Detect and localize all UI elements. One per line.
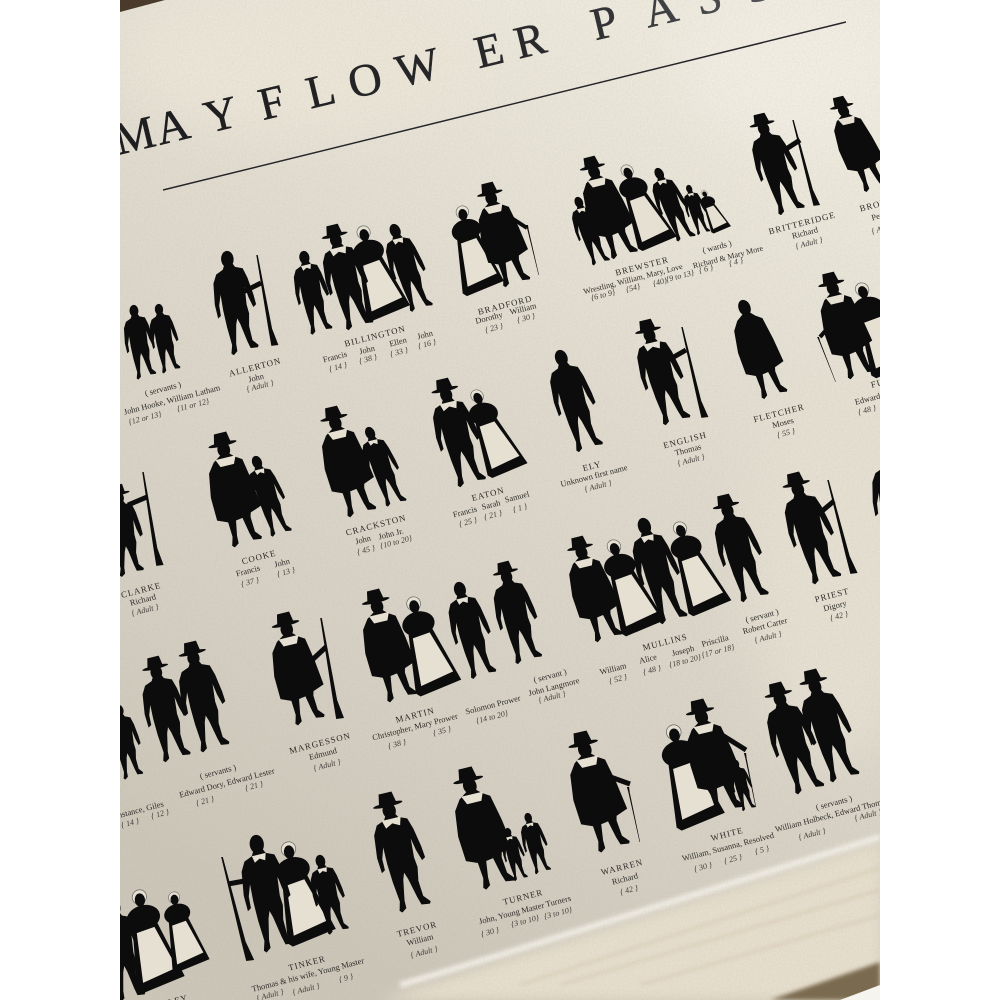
label: Billington: Ellen: [388, 335, 408, 349]
silhouettes: William Holbeck, Edward Thompson: [754, 665, 865, 797]
label: Crackston: John: [354, 533, 373, 546]
silhouette: Thomas with musket: [625, 315, 709, 428]
label: Britteridge: BRITTERIDGE: [768, 210, 836, 236]
label: Billington: { 14 }: [328, 360, 349, 374]
label: servants: ( servants ): [815, 794, 853, 812]
family: servants Dory and Lester: [133, 637, 276, 808]
label: Mullins: Joseph: [671, 644, 696, 658]
silhouettes: Thomas, wife and Young Master: [220, 829, 353, 961]
silhouettes: two servants: [119, 301, 184, 381]
silhouettes: Edward and wife: [807, 268, 917, 382]
label: Crackston: CRACKSTON: [345, 512, 407, 538]
title rule: [163, 22, 846, 190]
label: servants: ( servants ): [199, 763, 237, 781]
silhouettes: Edward Dory, Edward Lester: [133, 637, 235, 765]
label: Fuller: [854, 370, 910, 417]
label: Cooke: { 37 }: [240, 575, 261, 589]
family: Margesson: [261, 607, 352, 773]
label: Crackston: John Jr.: [377, 526, 405, 542]
label: Constance, Giles: [107, 800, 171, 830]
label: Bradford: William: [509, 301, 538, 317]
label: Billington: { 38 }: [358, 352, 379, 366]
label: Eaton: { 1 }: [512, 502, 529, 514]
silhouette: John with musket: [207, 246, 279, 358]
label: Billington: [322, 323, 438, 374]
label: Brewster: [582, 239, 765, 302]
label: servants: ( servants ): [144, 380, 182, 398]
family: Billington: [287, 220, 438, 374]
label: Allerton: John: [247, 371, 266, 384]
label: Billington: Francis: [322, 350, 348, 364]
label: White: { 30 }: [693, 860, 714, 874]
label: Brewster: Richard & Mary More: [692, 243, 765, 270]
label: Eaton: Sarah: [481, 498, 502, 512]
label: Turner: {3 to 10}: [543, 905, 574, 921]
label: Billington: { 16 }: [417, 337, 438, 351]
label: Bradford: { 30 }: [516, 311, 537, 325]
label: Turner: {3 to 10}: [510, 913, 541, 929]
label: Margesson: { Adult }: [313, 757, 342, 773]
label: Ely: { Adult }: [584, 478, 613, 494]
label: Fletcher: { 55 }: [776, 426, 797, 440]
label: Constance, Giles: { 12 }: [150, 807, 171, 821]
label: Trevor: William: [406, 932, 435, 948]
label: Mullins: {17 or 18}: [701, 642, 736, 660]
label: Constance, Giles: { 14 }: [120, 816, 141, 830]
silhouettes: Martin family: [351, 557, 547, 705]
label: Mullins: Robert Carter: [742, 616, 789, 636]
label: Clarke: [120, 580, 162, 618]
family: Warren: [556, 726, 644, 897]
label: Martin: { 35 }: [432, 724, 453, 738]
label: Clarke: { Adult }: [131, 602, 160, 618]
label: Ely: ELY: [581, 459, 603, 473]
silhouette: partial figure: [104, 702, 147, 781]
label: Martin: Christopher, Mary Prower: [371, 712, 459, 742]
label: Martin: ( servant ): [532, 667, 568, 685]
label: English: { Adult }: [677, 452, 706, 468]
label: White: William, Susanna, Resolved: [681, 831, 776, 863]
label: Priest: Digory: [822, 598, 848, 613]
family: Martin: [351, 557, 581, 751]
family: Brewster: [564, 152, 765, 302]
label: White: [681, 825, 776, 874]
label: Margesson: [288, 730, 352, 773]
label: Cooke: COOKE: [241, 548, 277, 566]
family: Eaton: [422, 374, 531, 529]
label: Priest: { 42 }: [829, 609, 850, 623]
label: Fletcher: FLETCHER: [752, 402, 806, 424]
label: Brewster: {40}: [652, 276, 669, 288]
label: Martin: [371, 667, 581, 751]
label: Tinker: TINKER: [287, 953, 327, 973]
label: Margesson: MARGESSON: [288, 730, 352, 756]
family: Tilley: [94, 883, 211, 1000]
label: Trevor: TREVOR: [396, 919, 438, 939]
silhouettes: John and two sons: [441, 762, 554, 893]
label: Priest: [814, 586, 850, 623]
label: servants: {11 or 12}: [176, 396, 211, 413]
silhouette: Ely: [540, 345, 608, 455]
label: Mullins: MULLINS: [641, 631, 689, 653]
silhouettes: Mullins family and servant: [556, 490, 774, 645]
label: Mullins: { 48 }: [642, 663, 663, 677]
label: Tinker: { Adult }: [292, 981, 321, 997]
label: Eaton: Samuel: [504, 489, 531, 505]
label: White: { 5 }: [754, 844, 771, 856]
label: Britteridge: Richard: [791, 225, 820, 241]
label: Mullins: Alice: [638, 652, 658, 666]
label: Mullins: [599, 607, 789, 686]
label: Trevor: [396, 919, 439, 960]
label: Margesson: Edmund: [308, 746, 339, 762]
label: servants: { Adult }: [798, 826, 827, 842]
label: Warren: [600, 857, 644, 897]
label: Clarke: Richard: [129, 592, 158, 608]
family: Tinker: [220, 829, 365, 1000]
silhouettes: Francis and Sarah: [422, 374, 530, 490]
label: servants: { 21 }: [244, 779, 265, 793]
label: Clarke: CLARKE: [120, 580, 162, 600]
label: Britteridge: [768, 210, 836, 251]
label: Mullins: { 52 }: [608, 672, 629, 686]
silhouettes: Brewster family and wards: [564, 152, 732, 267]
silhouette: William: [363, 787, 436, 915]
label: Mullins: {18 to 20}: [668, 652, 703, 669]
label: Brewster: {6 to 9}: [590, 287, 617, 302]
label: Brewster: {9 to 13}: [665, 268, 696, 284]
label: Bradford: [474, 293, 538, 335]
silhouette: Edmund with musket: [261, 607, 344, 728]
label: Allerton: { Adult }: [246, 378, 275, 394]
label: Cooke: [235, 548, 297, 589]
label: Bradford: { 23 }: [484, 321, 505, 335]
label: servants: { 21 }: [195, 794, 216, 808]
family: Ely: [540, 345, 629, 494]
label: servants: Edward Dory, Edward Lester: [178, 766, 276, 800]
silhouettes: William, Susanna, Resolved: [653, 694, 758, 832]
family: Clarke: [100, 472, 164, 618]
label: White: { 25 }: [723, 852, 744, 866]
silhouettes: Billington family: [287, 220, 437, 337]
label: Ely: Unknown first name: [560, 463, 629, 489]
label: Eaton: EATON: [470, 485, 506, 503]
family: Allerton: [207, 246, 282, 394]
label: Martin: John Langmore: [528, 676, 581, 698]
label: Eaton: Francis: [452, 505, 478, 519]
label: Allerton: ALLERTON: [228, 355, 282, 379]
label: Martin: {14 to 20}: [475, 708, 510, 725]
family: Priest: [772, 468, 858, 623]
label: Mullins: Priscilla: [701, 633, 730, 649]
label: Mullins: William: [599, 661, 628, 677]
label: Martin: Solomon Prower: [465, 694, 522, 716]
label: Brewster: ( wards ): [701, 239, 733, 255]
silhouettes: Francis and John: [198, 427, 296, 550]
label: Billington: John: [416, 328, 435, 341]
label: Eaton: [452, 485, 531, 529]
label: Constance, Giles: Constance, Giles: [107, 800, 165, 822]
silhouette: Richard with musket: [740, 109, 820, 218]
family: White: [653, 694, 776, 874]
family: Hopkins partial: [104, 702, 171, 830]
label: Fletcher: Moses: [771, 416, 795, 430]
family: Fuller: [807, 268, 917, 417]
label: Crackston: { 45 }: [356, 543, 377, 557]
family: White servants: [754, 665, 899, 842]
label: Brown: [858, 194, 900, 236]
label: Brewster: {54}: [625, 282, 642, 294]
family: Mullins: [556, 490, 789, 686]
label: English: [662, 430, 708, 468]
silhouette: Richard with musket: [100, 472, 164, 579]
label: servants: { Adult }: [854, 807, 883, 823]
label: Brown: Peter: [871, 209, 890, 223]
label: Fuller: FULLER: [870, 370, 910, 390]
label: servants: {12 or 13}: [128, 409, 163, 427]
label: Cooke: Francis: [235, 564, 261, 578]
label: Brown: { Adult }: [871, 220, 900, 236]
silhouettes: John and John Jr.: [309, 402, 411, 520]
label: Fuller: { 48 }: [857, 403, 878, 417]
label: Warren: WARREN: [600, 857, 644, 877]
label: Allerton: [228, 355, 282, 394]
label: servants: William Holbeck, Edward Thompson: [774, 794, 899, 834]
label: Trevor: { Adult }: [410, 944, 439, 960]
label: Bradford: Dorothy: [474, 310, 504, 326]
family: English: [625, 315, 709, 468]
label: Billington: BILLINGTON: [343, 323, 407, 349]
label: White: WHITE: [710, 825, 744, 843]
label: Turner: [478, 887, 574, 939]
label: Mullins: ( servant ): [744, 607, 780, 625]
label: Martin: MARTIN: [394, 705, 436, 725]
label: Eaton: { 25 }: [458, 515, 479, 529]
label: Bradford: BRADFORD: [477, 293, 533, 317]
silhouette: partial figure right edge: [867, 445, 918, 555]
silhouette: Digory with musket: [772, 468, 858, 587]
label: English: ENGLISH: [662, 430, 708, 450]
silhouettes: Tilley family: [94, 883, 211, 1000]
label: Brown: BROWN: [858, 194, 898, 214]
family: servants of Allerton: [119, 301, 222, 427]
family: Fletcher: [723, 295, 806, 440]
label: Martin: { Adult }: [538, 689, 567, 705]
label: Tinker: { 9 }: [338, 972, 355, 984]
label: Mullins: { Adult }: [754, 629, 783, 645]
silhouettes: Dorothy and William: [444, 178, 539, 297]
silhouette: Richard with cane: [556, 726, 640, 856]
family: Turner: [441, 762, 574, 939]
label: Priest: PRIEST: [814, 586, 850, 604]
photo margin: right: [880, 0, 1000, 1000]
label: Crackston: [345, 512, 414, 557]
label: Brewster: { 4 }: [728, 256, 745, 268]
label: Brewster: Wrestling, William, Mary, Love: [582, 262, 684, 296]
label: Turner: { 30 }: [480, 925, 501, 939]
label: Turner: John, Young Master Turners: [478, 894, 572, 926]
label: Martin: { 38 }: [387, 737, 408, 751]
family: Britteridge: [740, 109, 836, 251]
family: Brown: [819, 92, 900, 236]
label: Warren: { 42 }: [619, 883, 640, 897]
photo margin: left: [0, 0, 120, 1000]
label: Brewster: BREWSTER: [614, 254, 670, 278]
silhouette: Peter: [819, 92, 895, 194]
silhouette: Moses: [723, 295, 793, 402]
family: Trevor: [363, 787, 439, 960]
label: Billington: John: [358, 343, 377, 356]
label: Cooke: { 13 }: [276, 565, 297, 579]
family: Bradford: [444, 178, 539, 335]
label: Tinker: Thomas & his wife, Young Master: [251, 956, 365, 994]
label: Crackston: {10 to 20}: [379, 533, 414, 550]
label: Cooke: John: [273, 556, 292, 569]
label: Fletcher: [752, 402, 806, 440]
label: English: Thomas: [674, 442, 702, 458]
label: servants: John Hooke, William Latham: [123, 383, 222, 417]
label: Turner: TURNER: [502, 887, 544, 907]
label: Billington: { 33 }: [389, 345, 410, 359]
family: Crackston: [309, 402, 414, 557]
label: Eaton: { 21 }: [483, 508, 504, 522]
label: Britteridge: { Adult }: [795, 235, 824, 251]
family: Cooke: [198, 427, 297, 589]
label: Fuller: Edward & wife: [854, 385, 906, 407]
label: Warren: Richard: [611, 871, 640, 887]
label: Brewster: { 6 }: [698, 263, 715, 275]
